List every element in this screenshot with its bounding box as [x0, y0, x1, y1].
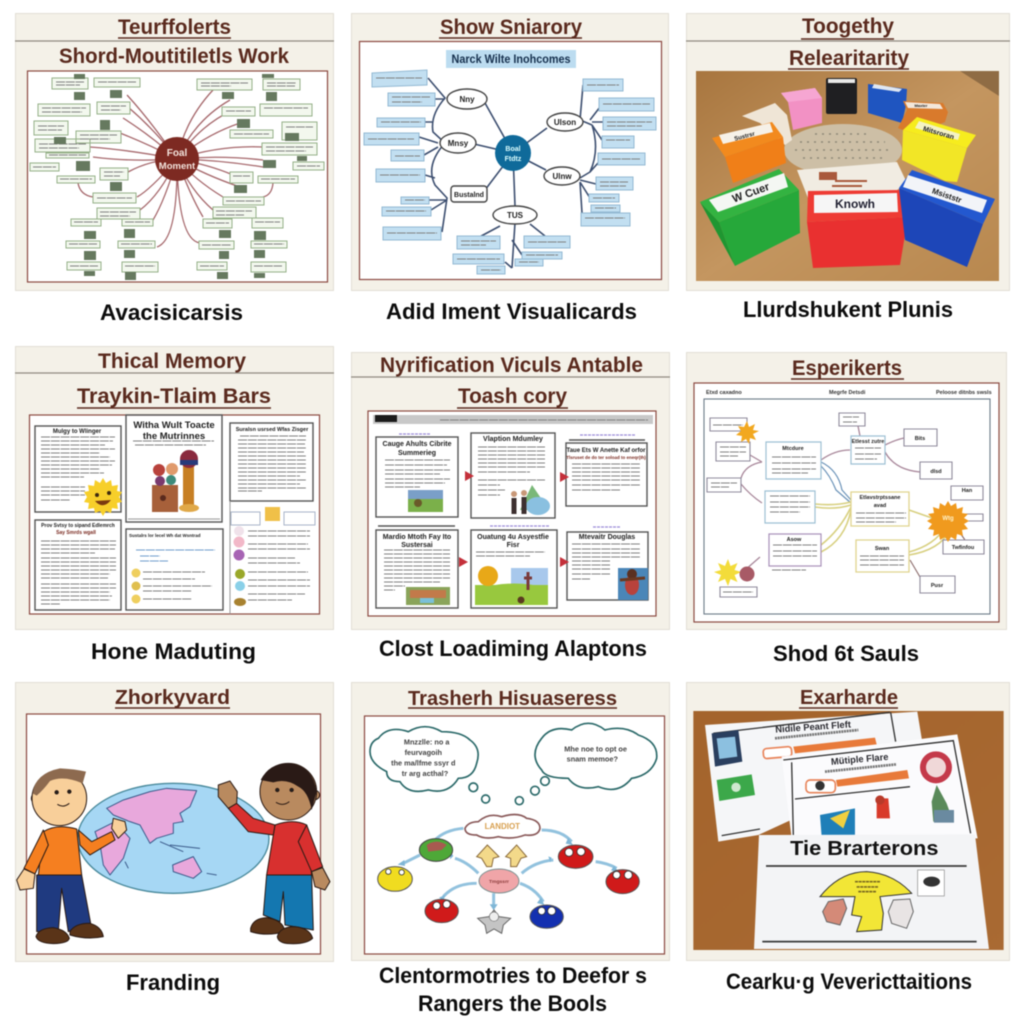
caption: Franding: Franding — [126, 970, 220, 995]
frame headings: Fisr — [507, 542, 520, 549]
box labels: Etlesst zutre — [852, 439, 884, 445]
column labels: Peloose ditnbs swsls — [936, 390, 992, 396]
illustration: clouds and concept map: the ma/lfme ssyr d — [391, 759, 456, 768]
illustration: clouds and concept map: feurvagoih — [405, 748, 443, 757]
page headings: Say Smrds wgall — [56, 530, 96, 536]
page headings: Suralsn usrsed Wfas Zisger — [236, 427, 309, 433]
hub label: Foal — [167, 148, 187, 159]
sun icons — [714, 421, 969, 586]
sun face icon — [84, 478, 122, 516]
photo: cards on a wooden table — [693, 711, 1004, 950]
box labels: Bits — [915, 436, 925, 442]
box labels: Pusr — [931, 583, 944, 589]
panel: blue mind map — [352, 14, 668, 290]
frame headings: Mardio Mtoth Fay Ito — [383, 534, 451, 541]
heading: Zhorkyvard: Zhorkyvard — [115, 687, 230, 709]
heading: Toogethy: Toogethy — [802, 15, 894, 38]
heading: Thical Memory: Thical Memory — [98, 350, 246, 373]
illustration: clouds and concept map: Mnzzlle: no a — [404, 737, 450, 746]
mind map chart — [28, 71, 328, 282]
caption: Llurdshukent Plunis: Llurdshukent Plunis — [743, 297, 953, 322]
subheading: Toash cory: Toash cory — [458, 385, 567, 408]
box labels — [782, 436, 974, 589]
caption: Clost Loadiming Alaptons: Clost Loadiming Alaptons — [379, 636, 647, 661]
box labels: Sustrsr — [734, 131, 756, 143]
illustration: clouds and concept map: tr arg acthal? — [402, 769, 449, 778]
mind map chart: Moment — [159, 161, 196, 172]
frame headings: Sustersai — [401, 542, 433, 549]
branch labels — [448, 95, 576, 220]
page headings: Mulgy to Wlinger — [53, 429, 102, 435]
branch labels: Ulnw — [552, 172, 572, 181]
illustration: clouds and concept map: snam memoe? — [567, 755, 618, 764]
caption: Clentormotries to Deefors Rangers the Bools — [379, 963, 647, 1016]
box labels: Mitsroran — [922, 126, 955, 141]
box labels — [731, 103, 963, 211]
box labels: Asow — [787, 537, 802, 543]
box labels: Twfinfou — [952, 545, 974, 551]
caption: Clentormotries to Deefors Rangers the Bools: Rangers the Bools — [418, 991, 607, 1016]
photo: cards on a wooden table: Tie Brarterons — [790, 838, 938, 860]
heading: Trasherh Hisuaseress: Trasherh Hisuaseress — [408, 688, 617, 710]
panel: storyboard — [351, 352, 670, 630]
heading: Nyrification Viculs Antable: Nyrification Viculs Antable — [380, 354, 643, 377]
page headings — [41, 420, 309, 538]
box labels: Msiststr — [931, 186, 963, 205]
caption: Avacisicarsis: Avacisicarsis — [100, 300, 243, 325]
frame headings: Taue Ets W Anette Kaf orfor — [566, 448, 646, 454]
sunburst label: Wtg — [942, 516, 954, 522]
blue mind map chart — [360, 42, 662, 280]
illustration: clouds and concept map: LANDIOT — [485, 822, 520, 831]
photo: cards on a wooden table: Mütiple Flare — [831, 752, 889, 767]
column labels: Etxd caxadno — [706, 390, 742, 396]
frame headings: Cauge Ahults Cibrite — [383, 441, 452, 448]
scene images — [406, 485, 648, 605]
box labels: Swan — [875, 546, 890, 552]
caption: Shod 6t Sauls: Shod 6t Sauls — [773, 641, 919, 666]
box labels: Mtcdure — [782, 446, 804, 452]
handout sheet — [30, 415, 320, 614]
branch labels: Mnsy — [448, 139, 469, 148]
frame headings: Vlaption Mdumley — [483, 436, 543, 443]
box labels: Knowh — [835, 197, 875, 211]
box labels: Han — [962, 488, 973, 494]
heading: Teurffolerts: Teurffolerts — [118, 16, 231, 39]
heading: Show Sniarory: Show Sniarory — [440, 16, 582, 39]
panel: photo of printed cards — [686, 682, 1010, 960]
frame headings: Mtevaitr Douglas — [579, 534, 635, 541]
branch labels: TUS — [507, 211, 524, 220]
page headings: Witha Wult Toacte — [133, 420, 215, 431]
arrows between frames — [459, 471, 569, 567]
box labels: Etlavstrptssane — [860, 495, 900, 501]
blue mind map chart: Ftdtz — [505, 156, 522, 163]
frame headings — [383, 436, 646, 549]
photo: coloured boxes on a table — [696, 71, 999, 281]
panel: coloured boxes photo — [686, 14, 1010, 290]
panel: flow diagram — [686, 352, 1006, 630]
panel: children with world map — [16, 682, 334, 962]
illustration: clouds and concept map: Mhe noe to opt oe — [564, 745, 627, 754]
hub label: Boal — [505, 146, 521, 153]
frame headings: Summerieg — [398, 450, 436, 457]
branch labels: Nny — [459, 95, 475, 104]
caption: Adid Iment Visualicards: Adid Iment Visualicards — [386, 299, 637, 324]
map title: Narck Wilte Inohcomes — [452, 52, 571, 66]
flow chart — [694, 383, 999, 622]
box labels: Maxter — [915, 103, 928, 108]
page headings: Sustalrs lor lecel Wh dat Wsntrad — [129, 533, 201, 538]
caption: Clentormotries to Deefors Rangers the Bools: Clentormotries to Deefor s — [379, 963, 647, 988]
photo: cards on a wooden table: Nidile Peant Fleft — [775, 719, 851, 735]
subheading: Relearitarity: Relearitarity — [789, 47, 909, 70]
branch labels: Bustalnd — [454, 192, 484, 199]
storyboard sheet — [368, 411, 656, 616]
heading: Esperikerts: Esperikerts — [792, 357, 902, 380]
caption: Hone Maduting: Hone Maduting — [91, 639, 256, 664]
page headings: the Mutrinnes — [143, 431, 205, 442]
branch labels: Ulson — [554, 118, 576, 127]
subheading: Traykin-Tlaim Bars: Traykin-Tlaim Bars — [77, 385, 271, 408]
frame headings: Ouatung 4u Asyestfie — [477, 534, 549, 541]
column labels: Megrfe Detsdi — [829, 390, 866, 396]
illustration: box and pillar — [152, 450, 199, 512]
box labels: dlsd — [930, 469, 942, 475]
box labels: W Cuer — [731, 181, 772, 205]
illustration: clouds and concept map — [370, 723, 657, 933]
column labels — [706, 390, 992, 396]
page headings: Prov Svtsy to sipand Edlemrch — [41, 523, 115, 529]
caption: Cearku·g Vevericttaitions: Cearku·g Vevericttaitions — [726, 969, 972, 994]
box labels: avad — [874, 503, 886, 509]
illustration: clouds and concept map: Tmgssrr — [489, 879, 509, 885]
panel: mind map with red hub — [15, 14, 334, 290]
panel: thought clouds and blobs — [352, 682, 670, 960]
illustration: world map and two children — [17, 763, 330, 944]
list icons — [132, 507, 315, 606]
panel: handout pages — [15, 346, 334, 630]
subheading: Shord-Moutitiletls Work: Shord-Moutitiletls Work — [59, 45, 289, 68]
frame headings: Tlsruset de do ter soload to eneqr(Ih) — [566, 455, 646, 460]
heading: Exarharde: Exarharde — [800, 687, 898, 709]
